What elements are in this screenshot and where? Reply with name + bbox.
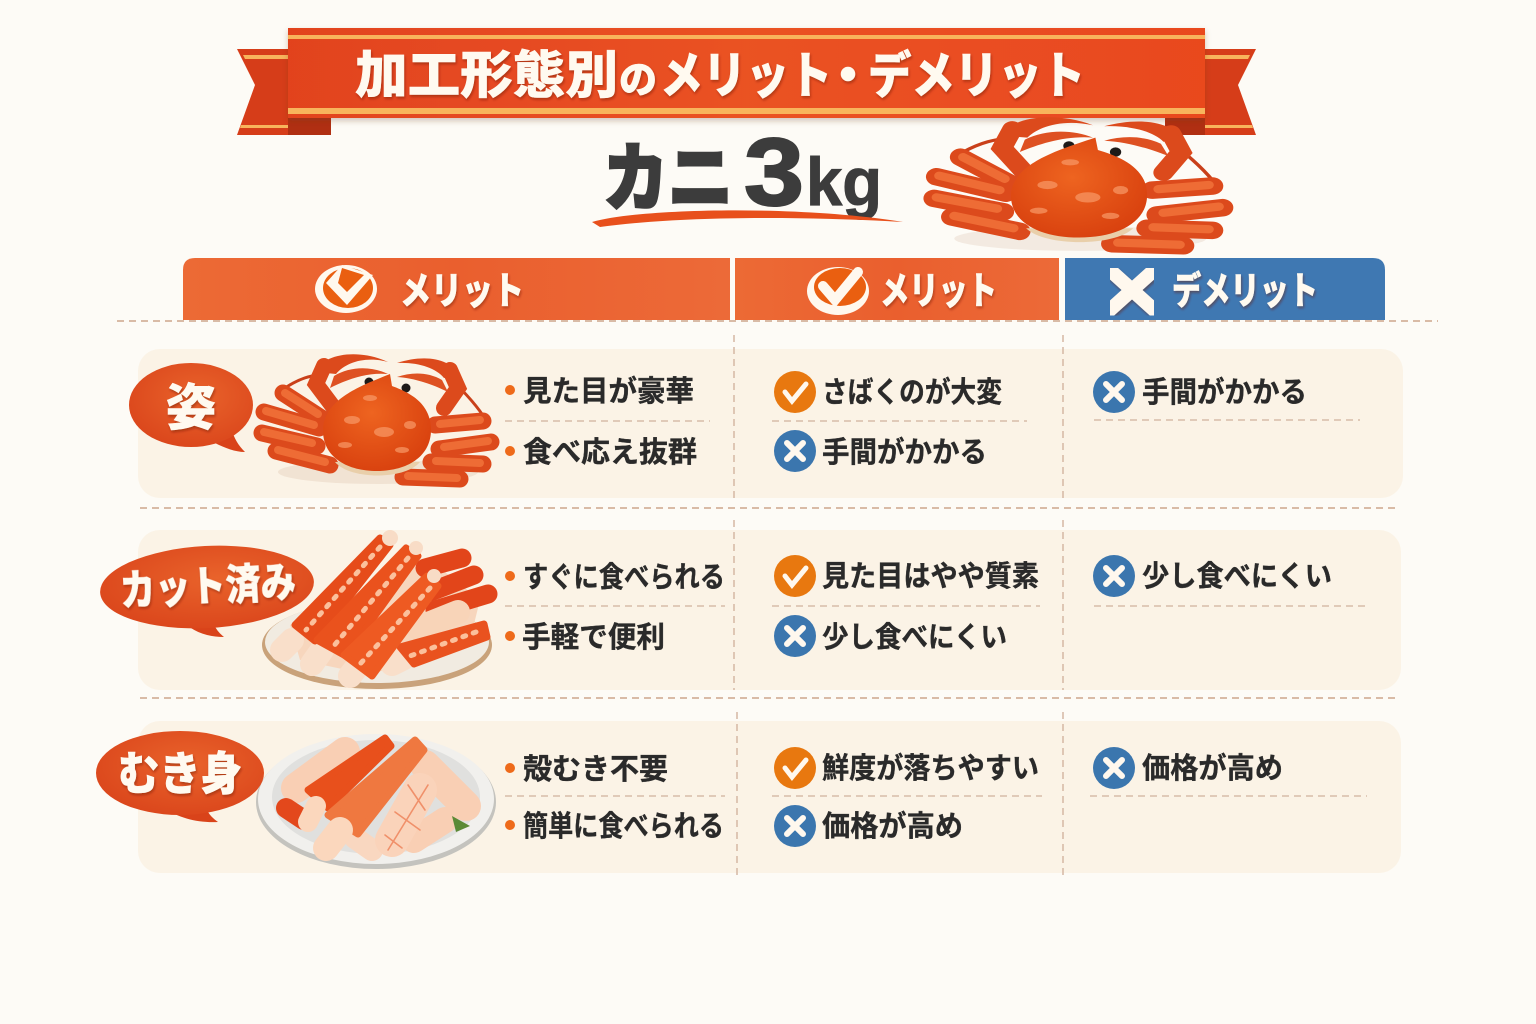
- column 2 items: 見た目はやや質素: [822, 560, 1039, 593]
- column 2 items: さばくのが大変: [822, 375, 1002, 409]
- merits text: 見た目が豪華: [523, 374, 694, 408]
- bubble: カット済み: カット済み: [119, 558, 297, 615]
- column header: demerit: [1065, 258, 1385, 320]
- merits text: [505, 374, 710, 469]
- subtitle: crab 3kg: 3: [744, 119, 804, 226]
- bubble: カット済み: [98, 540, 316, 637]
- bubble: むき身: むき身: [118, 748, 242, 800]
- column 3 items: [1093, 371, 1360, 420]
- bubble: 姿: [129, 363, 253, 452]
- merits text: 手軽で便利: [522, 621, 665, 654]
- illustration: plate of peeled crab meat: [256, 734, 496, 869]
- panel: row カット済み: [98, 520, 1401, 690]
- brush underline: [592, 210, 903, 227]
- subtitle: crab 3kg: kg: [806, 144, 882, 220]
- column 3 items: 手間がかかる: [1142, 375, 1307, 409]
- title banner: [237, 28, 1256, 135]
- title text: 加工形態別: [355, 47, 618, 104]
- merits text: [505, 561, 725, 654]
- subtitle: crab 3kg: [592, 119, 903, 227]
- header text: デメリット: [1172, 270, 1318, 313]
- column 3 items: 価格が高め: [1142, 751, 1283, 785]
- header text: メリット: [400, 271, 524, 313]
- column 3 items: [1090, 747, 1367, 796]
- merits text: [505, 753, 725, 843]
- title text: メリット: [660, 48, 832, 104]
- merits text: 殻むき不要: [523, 753, 668, 786]
- header text: メリット: [880, 271, 997, 313]
- icon: check circle: [315, 265, 377, 313]
- column 2 items: 手間がかかる: [822, 435, 987, 469]
- panel: row 姿: [129, 335, 1403, 498]
- column 2 items: [772, 555, 1040, 657]
- title text: デメリット: [868, 48, 1085, 104]
- column 2 items: [772, 371, 1027, 472]
- illustration: whole crab: [262, 354, 491, 484]
- column 2 items: 価格が高め: [822, 809, 963, 843]
- column 2 items: 少し食べにくい: [822, 621, 1007, 654]
- column 3 items: [1093, 555, 1365, 606]
- icon: x mark: [1112, 272, 1152, 308]
- column 2 items: [772, 747, 1042, 847]
- merits text: すぐに食べられる: [523, 561, 725, 594]
- title text: ・: [823, 48, 873, 104]
- column 2 items: 鮮度が落ちやすい: [822, 751, 1039, 785]
- illustration: whole crab top: [934, 117, 1223, 251]
- column header: merit 1: [183, 258, 730, 320]
- merits text: 食べ応え抜群: [523, 436, 697, 469]
- icon: check circle: [807, 267, 869, 315]
- column 3 items: 少し食べにくい: [1142, 560, 1332, 593]
- panel: row むき身: [96, 712, 1401, 875]
- title text: の: [619, 60, 657, 102]
- bubble: 姿: 姿: [166, 380, 216, 436]
- bubble: むき身: [96, 731, 264, 822]
- illustration: plate of cut crab legs: [262, 530, 492, 689]
- merits text: 簡単に食べられる: [523, 810, 724, 843]
- subtitle: crab 3kg: カニ: [603, 137, 733, 220]
- column header: merit 2: [735, 258, 1059, 320]
